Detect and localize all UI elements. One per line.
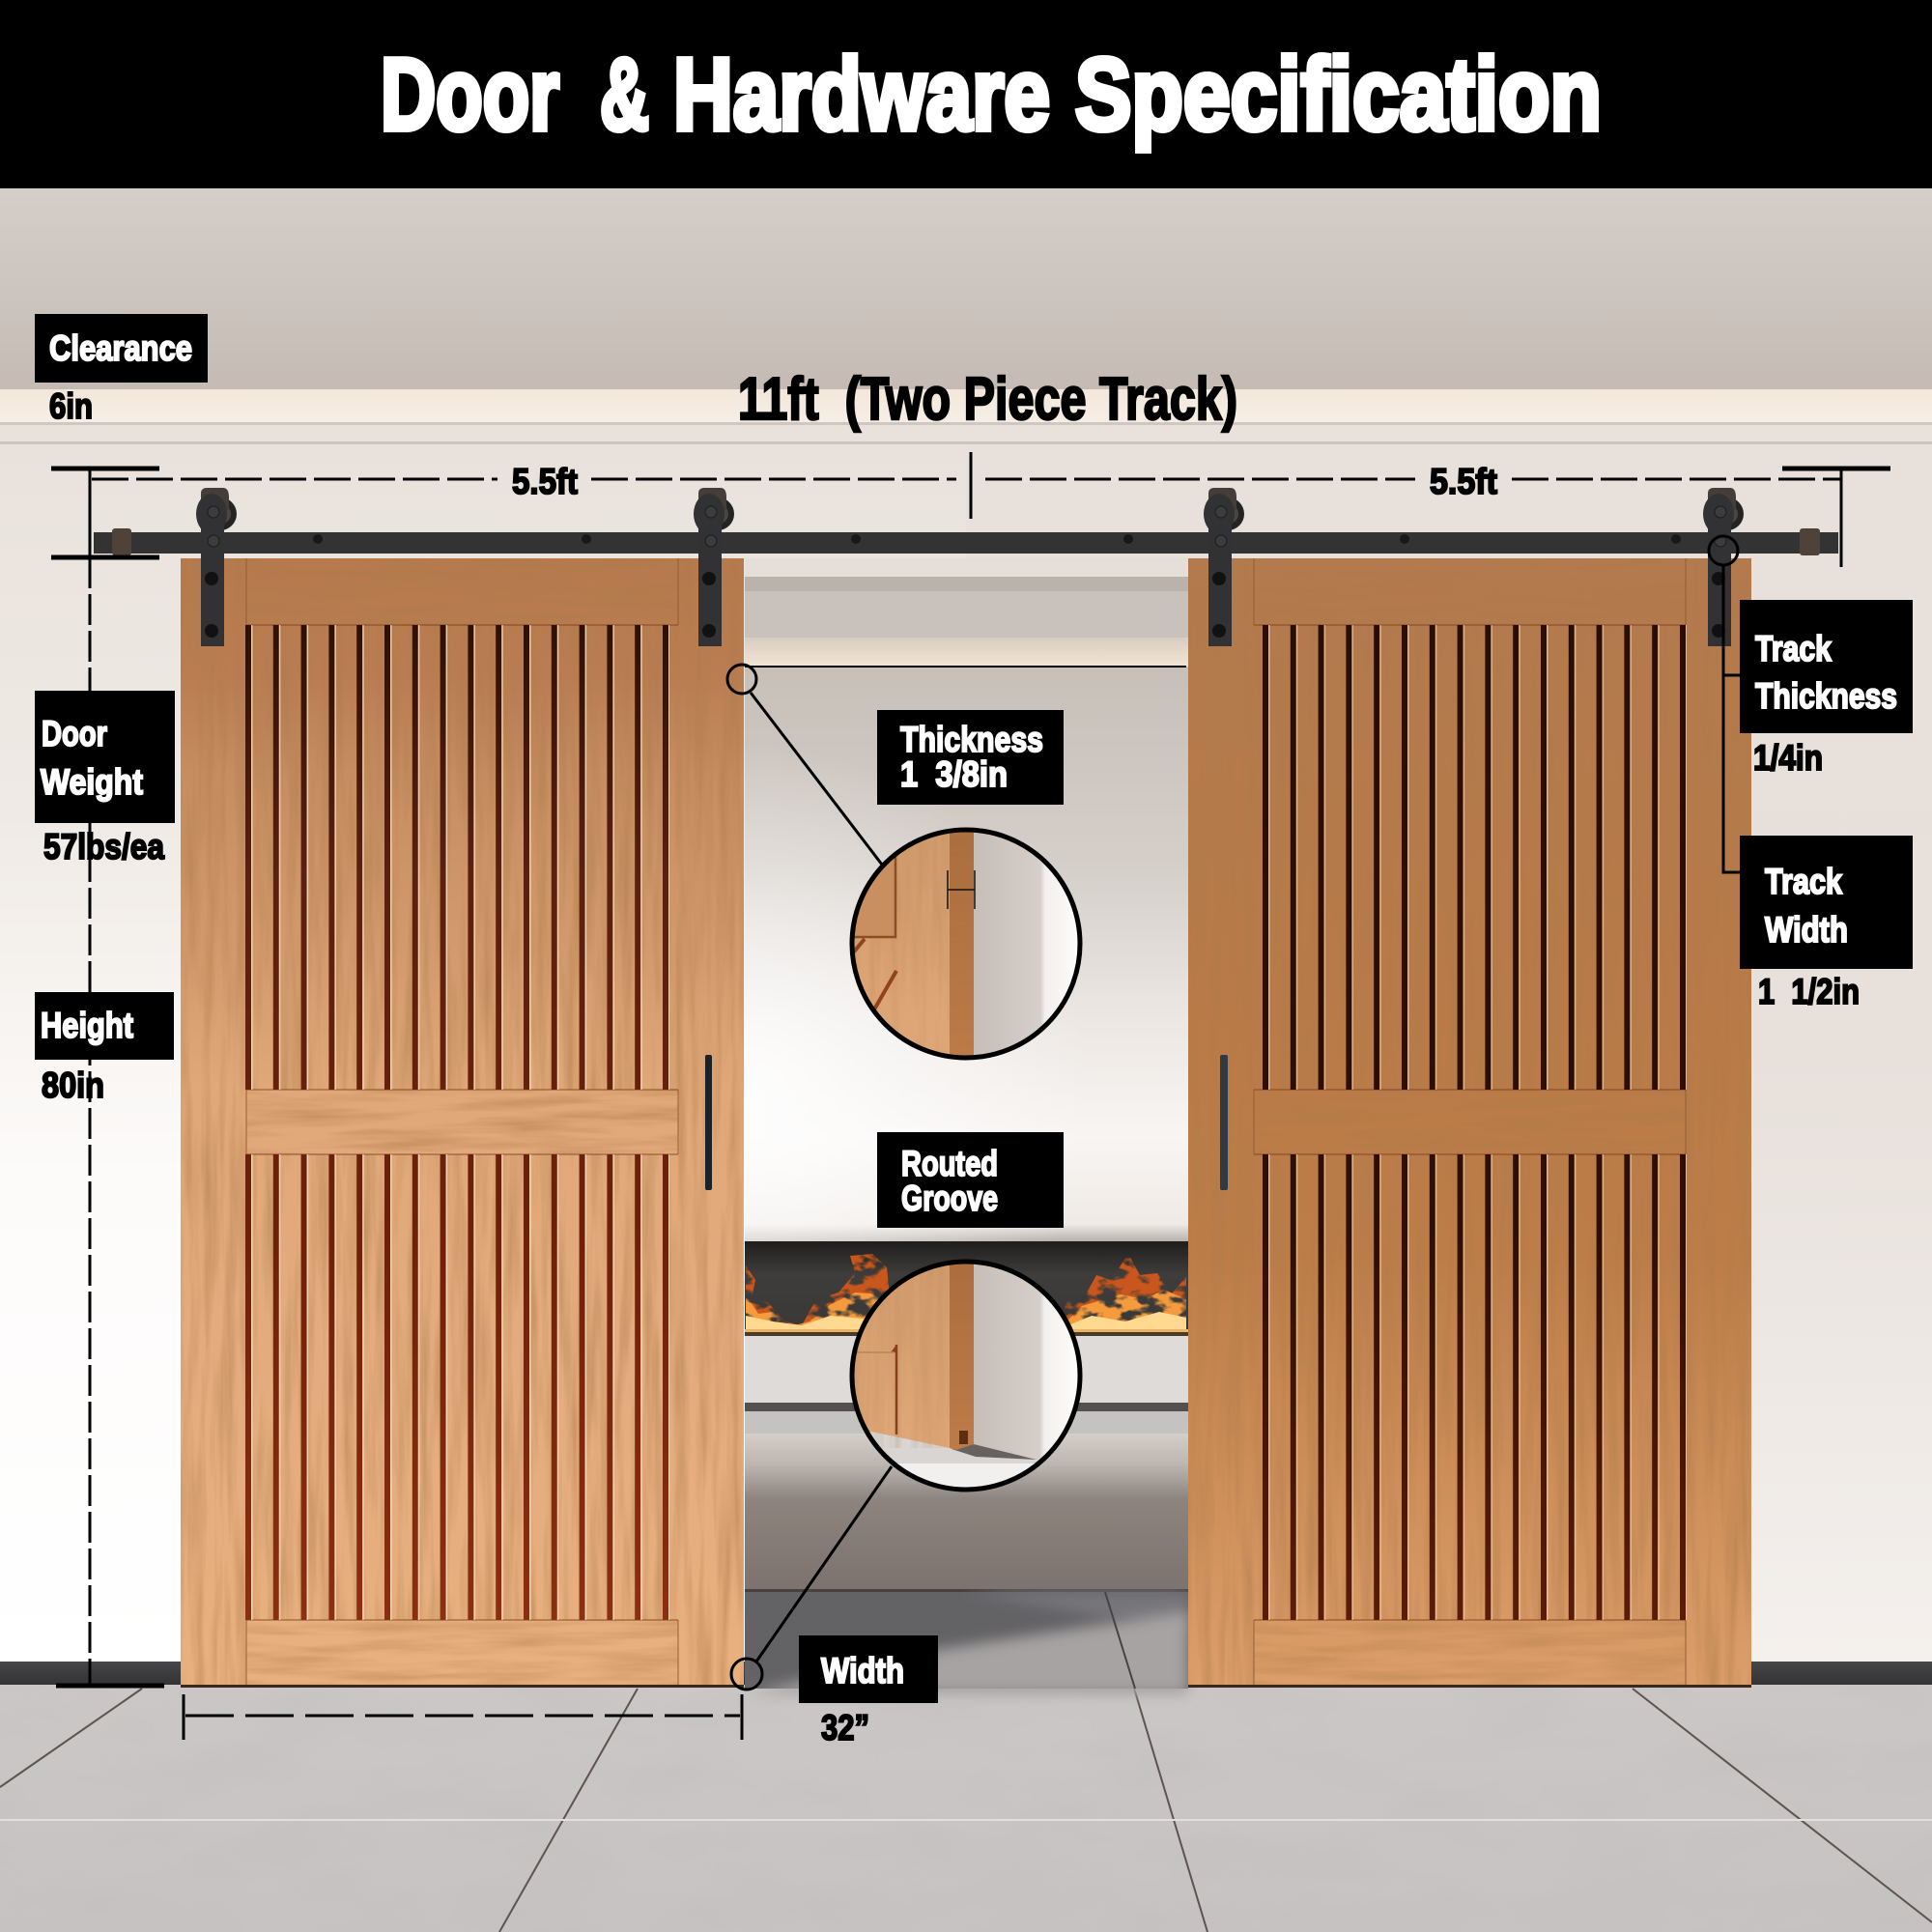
label: door weight: Door [42, 714, 107, 753]
magnifier: routed groove detail [850, 1256, 1087, 1497]
label: track width: Track [1765, 862, 1842, 901]
label: track thickness: 1/4in [1753, 738, 1823, 778]
grooves: left door [245, 858, 669, 1387]
magnifier: door thickness detail [850, 826, 1085, 1063]
fireplace [745, 1241, 1188, 1336]
callout: thickness pointer [727, 665, 1186, 865]
label: track width [1740, 836, 1913, 1011]
label: door weight: 57lbs/ea [43, 827, 164, 867]
label: door weight: Weight [41, 762, 143, 802]
label: thickness [877, 710, 1064, 805]
label: track thickness: Track [1755, 629, 1832, 668]
label: width: 32” [821, 1708, 869, 1747]
hanger 4 [1703, 488, 1744, 646]
opening: room beyond the doors [745, 558, 1188, 1694]
grooves: right door [1263, 858, 1687, 1387]
callout: width pointer [731, 1466, 892, 1690]
label: routed groove: Routed [901, 1144, 998, 1183]
track bolts [313, 534, 1681, 544]
track length heading: 11ft (Two Piece Track) [738, 366, 1237, 433]
callout line to track detail [1709, 536, 1740, 872]
label: height [35, 992, 174, 1105]
handle [1220, 1055, 1228, 1190]
header band [0, 0, 1932, 188]
dimension: track halves [51, 452, 1890, 567]
hanger 3 [1204, 488, 1244, 646]
title: Door [381, 38, 559, 152]
right door [1188, 558, 1751, 1688]
label: track thickness: Thickness [1755, 676, 1897, 716]
label: clearance: 6in [49, 386, 93, 426]
handle [705, 1055, 712, 1190]
label: thickness: Thickness [900, 720, 1043, 759]
left door [181, 558, 744, 1688]
dimension: track halves: 5.5ft [512, 462, 578, 501]
title: Specification [1075, 38, 1602, 152]
hanger 1 [196, 488, 237, 646]
label: track thickness [1740, 600, 1913, 778]
label: clearance [35, 314, 208, 426]
hanger 2 [694, 488, 734, 646]
label: width [799, 1635, 938, 1747]
track stops [112, 528, 1820, 555]
thickness dimension mark [948, 870, 975, 909]
label: width: Width [821, 1651, 904, 1690]
title: Hardware [673, 38, 1050, 152]
title: & [600, 38, 649, 152]
label: track width: 1 1/2in [1758, 972, 1860, 1011]
title [381, 38, 1602, 152]
label: thickness: 1 3/8in [900, 754, 1008, 794]
barn door track [94, 528, 1838, 555]
label: height: 80in [42, 1065, 104, 1105]
label: door weight [35, 691, 175, 867]
dimension: door width [184, 1694, 742, 1740]
dimension: door height [56, 557, 164, 1686]
label: height: Height [41, 1006, 133, 1045]
label: clearance: Clearance [49, 328, 192, 368]
label: routed groove: Groove [901, 1179, 998, 1218]
dimension: track halves: 5.5ft [1430, 462, 1497, 501]
label: routed groove [877, 1132, 1064, 1228]
label: track width: Width [1765, 910, 1848, 950]
